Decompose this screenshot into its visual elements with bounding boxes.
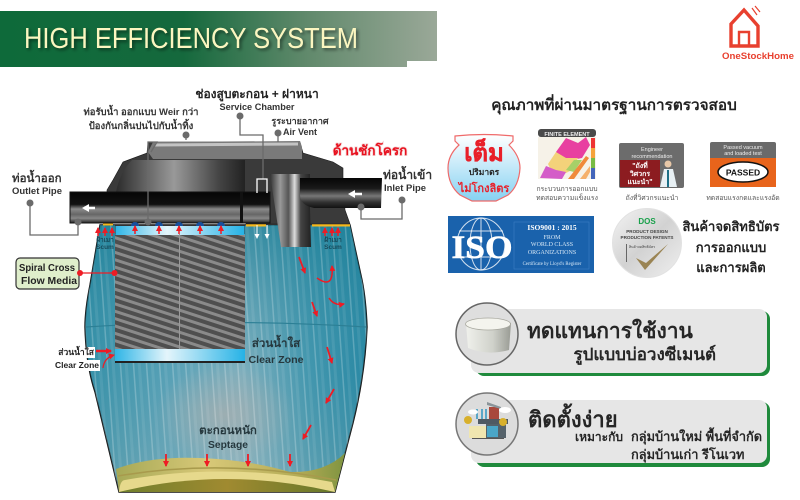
label: inlet pipe: Inlet Pipe: [384, 183, 426, 193]
badge: engineer recommendation: Engineer: [641, 147, 663, 153]
callout: spiral cross flow media: Spiral Cross: [19, 263, 75, 274]
label: outlet pipe: Outlet Pipe: [12, 186, 62, 196]
outlet pipe: [70, 192, 270, 223]
label: clear zone: [248, 334, 304, 366]
callout: spiral cross flow media: [16, 258, 118, 289]
red flow arrows: [96, 226, 344, 466]
icon: houses: [456, 393, 518, 455]
title banner: HIGH EFFICIENCY SYSTEM: [26, 25, 360, 57]
leader lines: [30, 116, 402, 235]
badge: DOS design patents: PRODUCTION PATENTS: [621, 235, 673, 240]
badge: finite element: [536, 129, 598, 202]
label: scum: ฝ้าเมา: [324, 235, 342, 244]
panel: easy to install: [456, 393, 770, 467]
badge: engineer recommendation: recommendation: [632, 154, 672, 160]
badge: passed vacuum test: PASSED: [726, 168, 760, 178]
badge: ISO 9001: ISO: [452, 230, 512, 266]
text: product patents: [682, 219, 780, 275]
badge: ISO 9001: WORLD CLASS: [531, 242, 573, 248]
badge: engineer recommendation: แนะนำ": [627, 178, 653, 186]
label: septage: [199, 424, 257, 451]
label: clear zone small: [55, 345, 100, 371]
badge: finite element: กระบวนการออกแบบ: [536, 186, 598, 193]
badge: full volume: ไม่โกงลิตร: [457, 181, 509, 195]
badge: passed vacuum test: and loaded test: [724, 151, 762, 157]
title banner: [0, 11, 437, 67]
badge: ISO 9001: ISO9001 : 2015: [527, 223, 577, 232]
label: suction side: ด้านชักโครก: [333, 141, 407, 158]
septic tank diagram: [70, 141, 382, 492]
service chamber lid: [148, 141, 302, 159]
label: clear zone small: ส่วนน้ำใส: [58, 345, 95, 357]
label: weir: [83, 104, 199, 132]
blue weir openings: [131, 222, 225, 226]
label: service chamber: Service Chamber: [220, 102, 295, 112]
panel: replace cement ring: ทดแทนการใช้งาน: [527, 318, 694, 343]
badge: DOS design patents: สินค้าจดสิทธิบัตร: [629, 245, 655, 249]
badge: full volume: ปริมาตร: [469, 167, 500, 177]
badge: passed vacuum test: Passed vacuum: [723, 145, 763, 151]
label: outlet pipe: [12, 169, 62, 196]
label: weir: ป้องกันกลิ่นปนไปกับน้ำทิ้ง: [89, 118, 194, 132]
badge: ISO 9001: Certificate by Lloyd's Register: [523, 262, 582, 267]
heading: quality standards: คุณภาพที่ผ่านมาตรฐานการตรวจสอบ: [491, 93, 737, 115]
badge: DOS design patents: [612, 208, 682, 278]
label: weir: ท่อรับน้ำ ออกแบบ Weir กว่า: [83, 104, 199, 118]
badge: finite element: FINITE ELEMENT: [544, 132, 590, 138]
badge: engineer recommendation: วิศวกร: [629, 170, 650, 178]
badge: finite element: ทดสอบความแข็งแรง: [536, 193, 598, 202]
text: product patents: และการผลิต: [696, 260, 766, 275]
badge: full volume: เต็ม: [464, 138, 504, 167]
badge: engineer recommendation: [619, 143, 684, 202]
panel: easy to install: กลุ่มบ้านใหม่ พื้นที่จำกัด: [631, 427, 762, 445]
panel: replace cement ring: รูปแบบบ่อวงซีเมนต์: [573, 344, 716, 366]
panel: easy to install: ติดตั้งง่าย: [528, 403, 618, 432]
label: clear zone small: Clear Zone: [55, 361, 100, 370]
title banner: HIGH EFFICIENCY SYSTEM: [24, 23, 358, 55]
label: scum: Scum: [324, 244, 342, 251]
label: inlet pipe: [383, 165, 432, 193]
badge: engineer recommendation: "ถังที่: [632, 160, 648, 170]
badge: DOS design patents: DOS: [638, 217, 656, 226]
badge: passed vacuum test: ทดสอบแรงกดและแรงอัด: [706, 194, 780, 202]
label: outlet pipe: ท่อน้ำออก: [12, 169, 62, 185]
inlet tee pipe: [270, 174, 311, 247]
spiral cross flow media block: [115, 225, 245, 363]
badge: engineer recommendation: ถังที่วิศวกรแนะนำ: [626, 193, 679, 202]
panel: easy to install: กลุ่มบ้านเก่า รีโนเวท: [631, 446, 744, 463]
badge: ISO 9001: [448, 216, 594, 273]
scum layers: [103, 223, 113, 226]
tank seam: [86, 322, 366, 327]
badge: passed vacuum test: [706, 142, 780, 202]
label: scum: ฝ้าเมา: [96, 235, 114, 244]
label: service chamber: ช่องสูบตะกอน + ฝาหนา: [195, 87, 319, 102]
label: air vent: [271, 116, 329, 137]
panel: replace cement ring: [456, 303, 770, 376]
leader dots: [26, 112, 406, 226]
badge: ISO 9001: FROM: [543, 235, 561, 241]
text: product patents: การออกแบบ: [696, 240, 766, 255]
callout: spiral cross flow media: Flow Media: [21, 276, 77, 287]
label: air vent: รูระบายอากาศ: [271, 116, 329, 127]
tank body water: [85, 225, 367, 492]
label: inlet pipe: ท่อน้ำเข้า: [383, 165, 432, 182]
logo: OneStockHome: OneStockHome: [722, 51, 794, 62]
logo: OneStockHome: [722, 6, 794, 62]
septage sludge layer: [116, 453, 345, 492]
icon: cement ring: [456, 303, 518, 365]
tank dome cap: [70, 142, 350, 224]
badge: DOS design patents: PRODUCT DESIGN: [626, 229, 668, 234]
label: scum: Scum: [96, 244, 114, 251]
label: septage: Septage: [208, 439, 248, 451]
flow arrows white: [84, 194, 362, 238]
label: scum: [96, 235, 342, 251]
text: product patents: สินค้าจดสิทธิบัตร: [682, 219, 780, 234]
panel: easy to install: เหมาะกับ: [575, 430, 623, 444]
label: septage: ตะกอนหนัก: [199, 424, 257, 437]
badge: full volume: [448, 134, 520, 201]
label: service chamber: [195, 87, 319, 112]
label: clear zone: ส่วนน้ำใส: [252, 334, 301, 350]
label: air vent: Air Vent: [283, 127, 317, 137]
label: clear zone: Clear Zone: [248, 354, 304, 366]
badge: ISO 9001: ORGANIZATIONS: [528, 250, 576, 256]
